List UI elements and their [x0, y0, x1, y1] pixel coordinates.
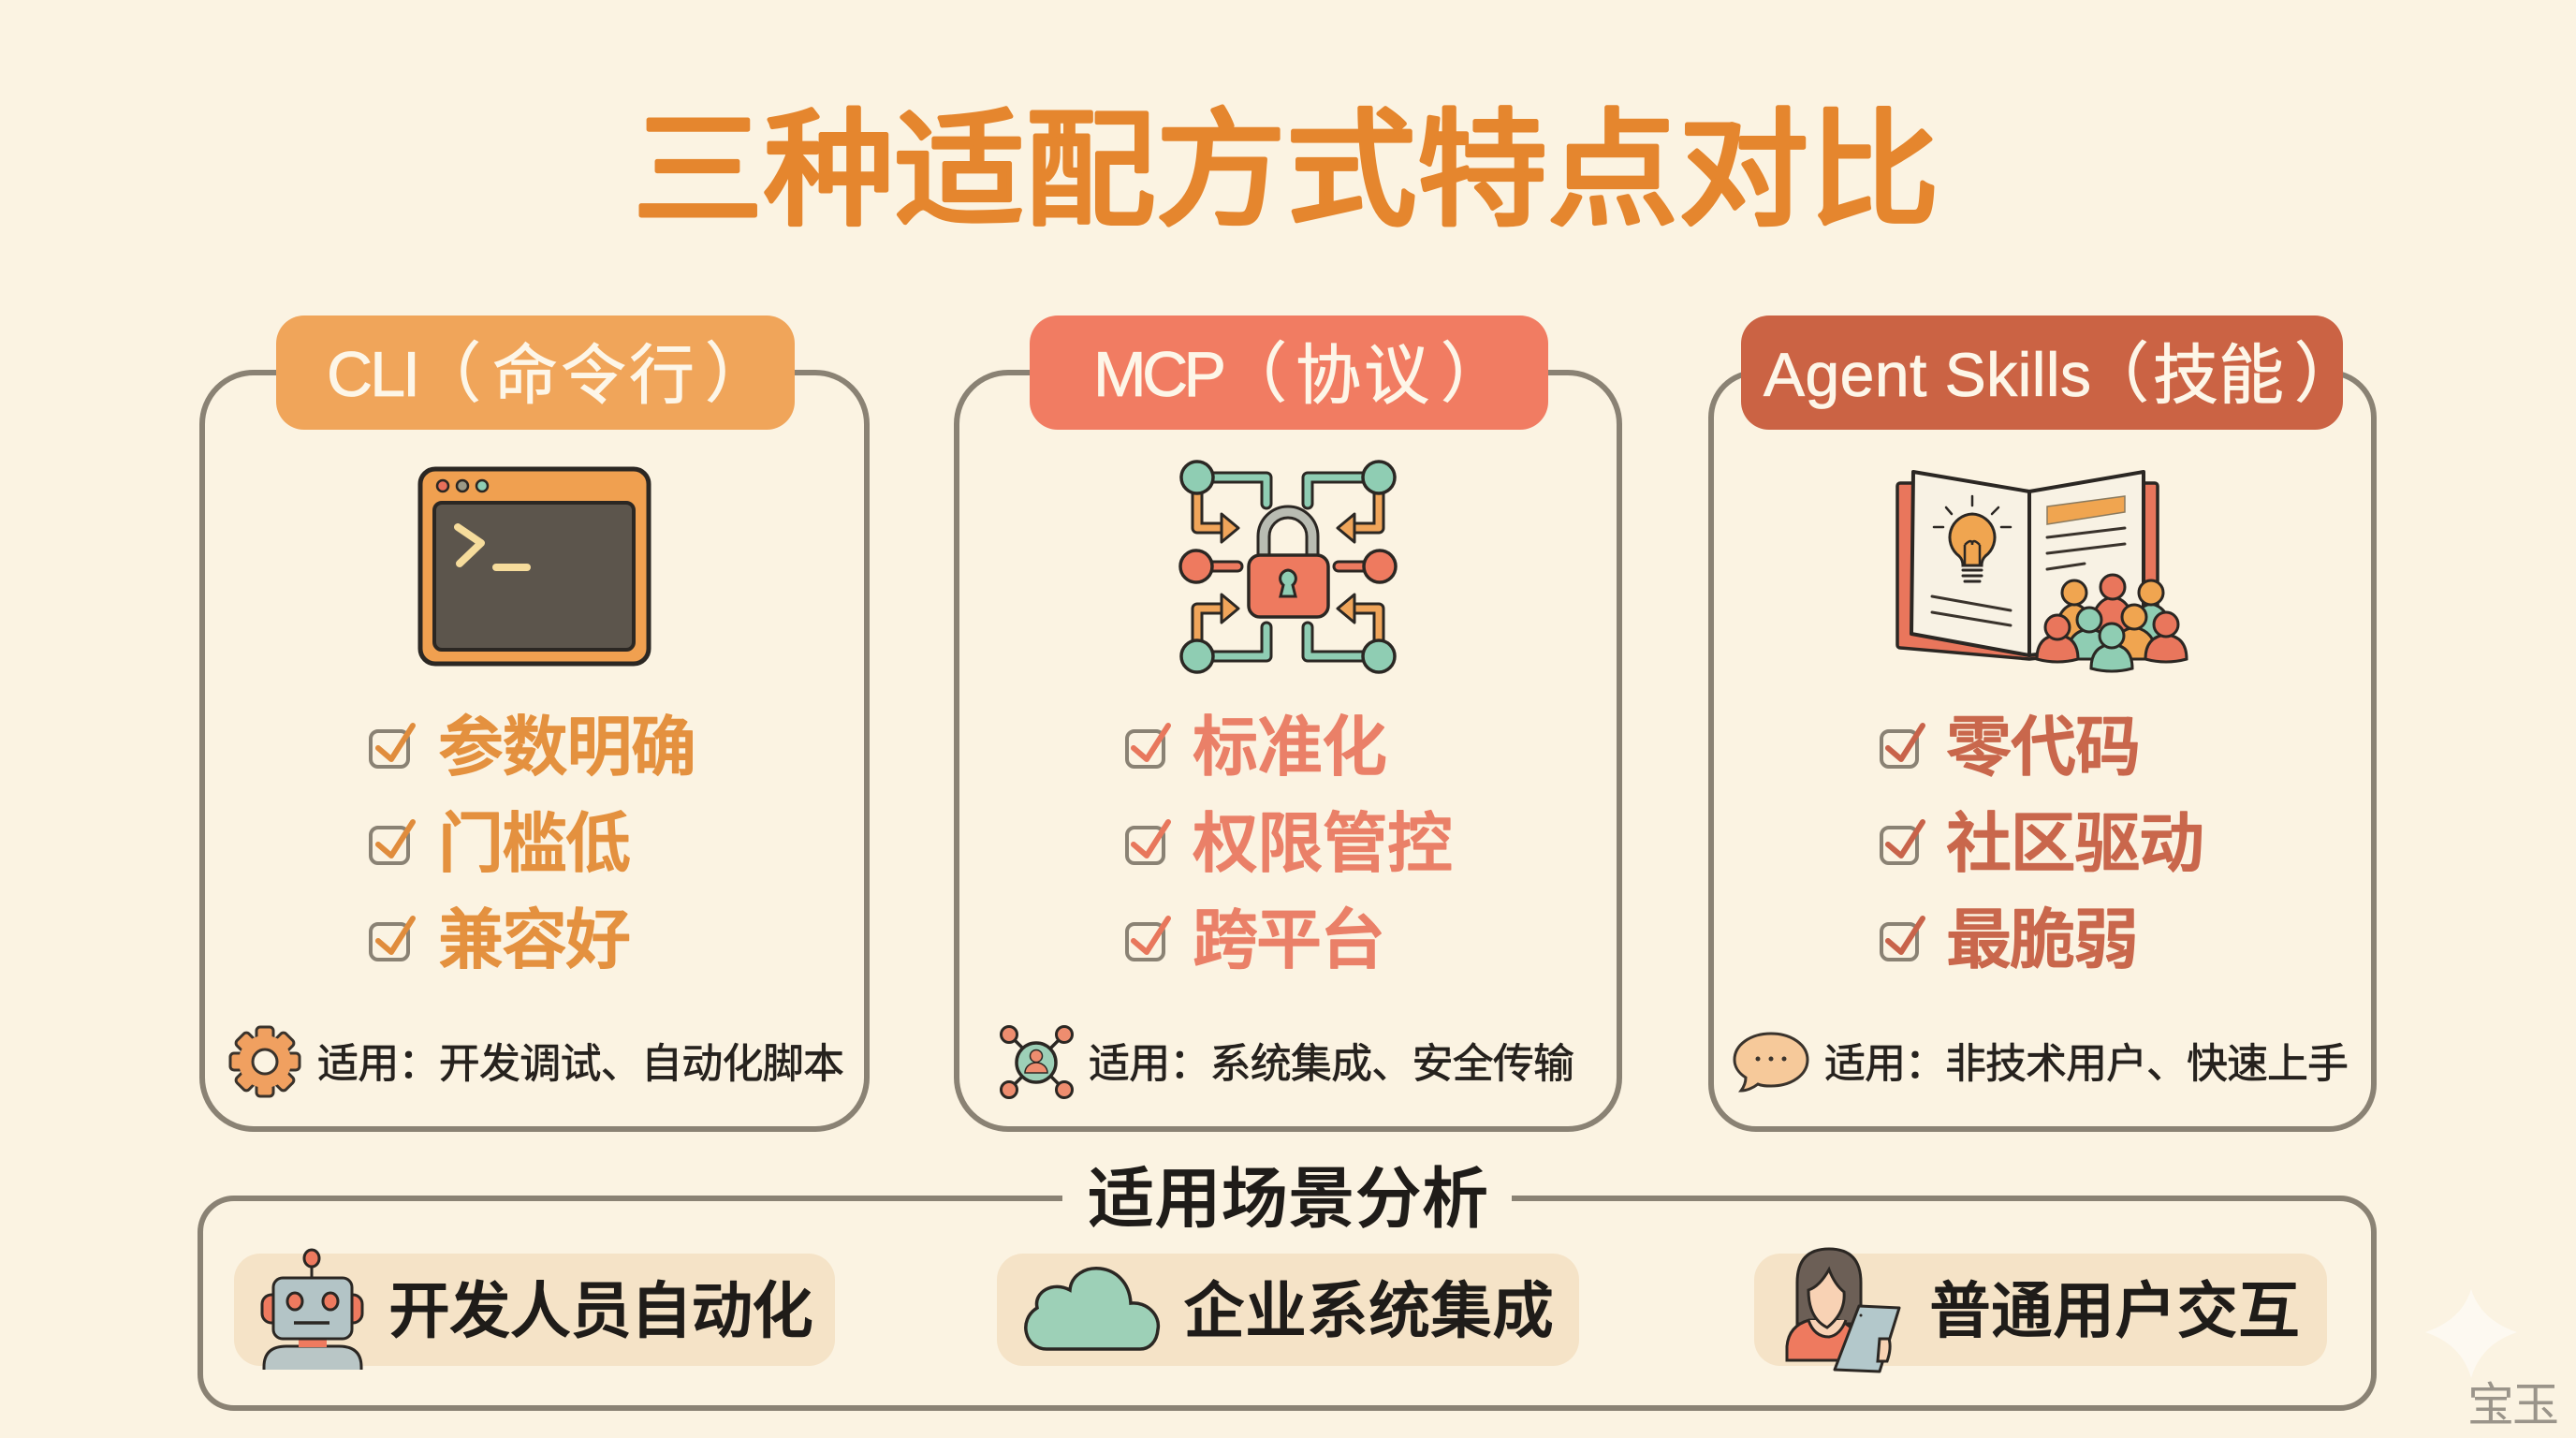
- item: 权限管控: 权限管控: [1193, 791, 1453, 886]
- label: 企业系统集成: [1183, 1261, 1554, 1351]
- item: 参数明确: 参数明确: [438, 695, 696, 789]
- icon: sparkle: [2425, 1289, 2517, 1378]
- item: 跨平台: 跨平台: [1193, 888, 1385, 982]
- watermark: [2425, 1289, 2559, 1435]
- icon: person with tablet: [1787, 1249, 1899, 1372]
- heading pill: Agent Skills: ）: [2294, 321, 2360, 416]
- chip: end user interaction: [1754, 1249, 2327, 1372]
- usage text: MCP: 适用：系统集成、安全传输: [1089, 1030, 1574, 1090]
- chip: developer automation: [234, 1250, 835, 1370]
- heading pill: Agent Skills: [1741, 315, 2360, 430]
- icon: speech bubble: [1734, 1034, 1808, 1091]
- panel: CLI: [202, 315, 867, 1129]
- icon: lock with connections: [1180, 462, 1396, 672]
- item: 最脆弱: 最脆弱: [1946, 888, 2139, 982]
- heading pill: Agent Skills: Agent Skills: [1764, 340, 2091, 409]
- heading pill: Agent Skills: （: [2084, 321, 2149, 416]
- item: 标准化: 标准化: [1193, 695, 1387, 789]
- panel heading: 适用场景分析: [1088, 1146, 1488, 1241]
- icon: gear: [230, 1027, 300, 1096]
- feature list: MCP: [1127, 695, 1453, 982]
- feature list: CLI: [371, 695, 696, 982]
- heading pill: CLI: （: [416, 321, 481, 416]
- panel outline: [200, 1198, 2374, 1408]
- chip: enterprise integration: [997, 1254, 1579, 1366]
- heading pill: Agent Skills: 技能: [2153, 323, 2284, 418]
- heading pill: MCP: MCP: [1093, 339, 1226, 410]
- heading pill: MCP: 协议: [1295, 323, 1429, 418]
- panel: MCP: [957, 315, 1619, 1129]
- card outline: [202, 373, 867, 1129]
- card outline: [957, 373, 1619, 1129]
- panel: Agent Skills: [1711, 315, 2374, 1129]
- heading pill: CLI: 命令行: [492, 323, 695, 418]
- item: 门槛低: 门槛低: [438, 791, 631, 886]
- heading pill: CLI: [276, 315, 795, 430]
- heading pill: MCP: （: [1222, 321, 1287, 416]
- panel: usage scenarios: [200, 1146, 2374, 1408]
- icon: cloud: [1026, 1269, 1158, 1349]
- usage text: Agent Skills: 适用：非技术用户、快速上手: [1824, 1030, 2349, 1090]
- item: 兼容好: 兼容好: [438, 888, 631, 982]
- heading pill: CLI: CLI: [327, 339, 420, 410]
- label: 普通用户交互: [1929, 1261, 2300, 1351]
- icon: robot: [262, 1250, 362, 1370]
- watermark text: 宝玉: [2467, 1368, 2559, 1435]
- label: 开发人员自动化: [388, 1261, 813, 1351]
- icon: network user: [1002, 1026, 1073, 1097]
- icon: terminal window: [420, 469, 649, 664]
- heading pill: MCP: [1030, 315, 1548, 430]
- item: 社区驱动: 社区驱动: [1946, 791, 2204, 886]
- card outline: [1711, 373, 2374, 1129]
- icon: open book with community: [1897, 472, 2187, 671]
- icon: people group: [2037, 575, 2187, 671]
- title: 三种适配方式特点对比: [633, 67, 1939, 252]
- feature list: Agent Skills: [1881, 695, 2204, 982]
- icon: lightbulb: [1934, 496, 2011, 581]
- heading pill: MCP: ）: [1441, 321, 1506, 416]
- heading pill: CLI: ）: [705, 321, 770, 416]
- usage text: CLI: 适用：开发调试、自动化脚本: [317, 1030, 844, 1090]
- item: 零代码: 零代码: [1946, 695, 2141, 789]
